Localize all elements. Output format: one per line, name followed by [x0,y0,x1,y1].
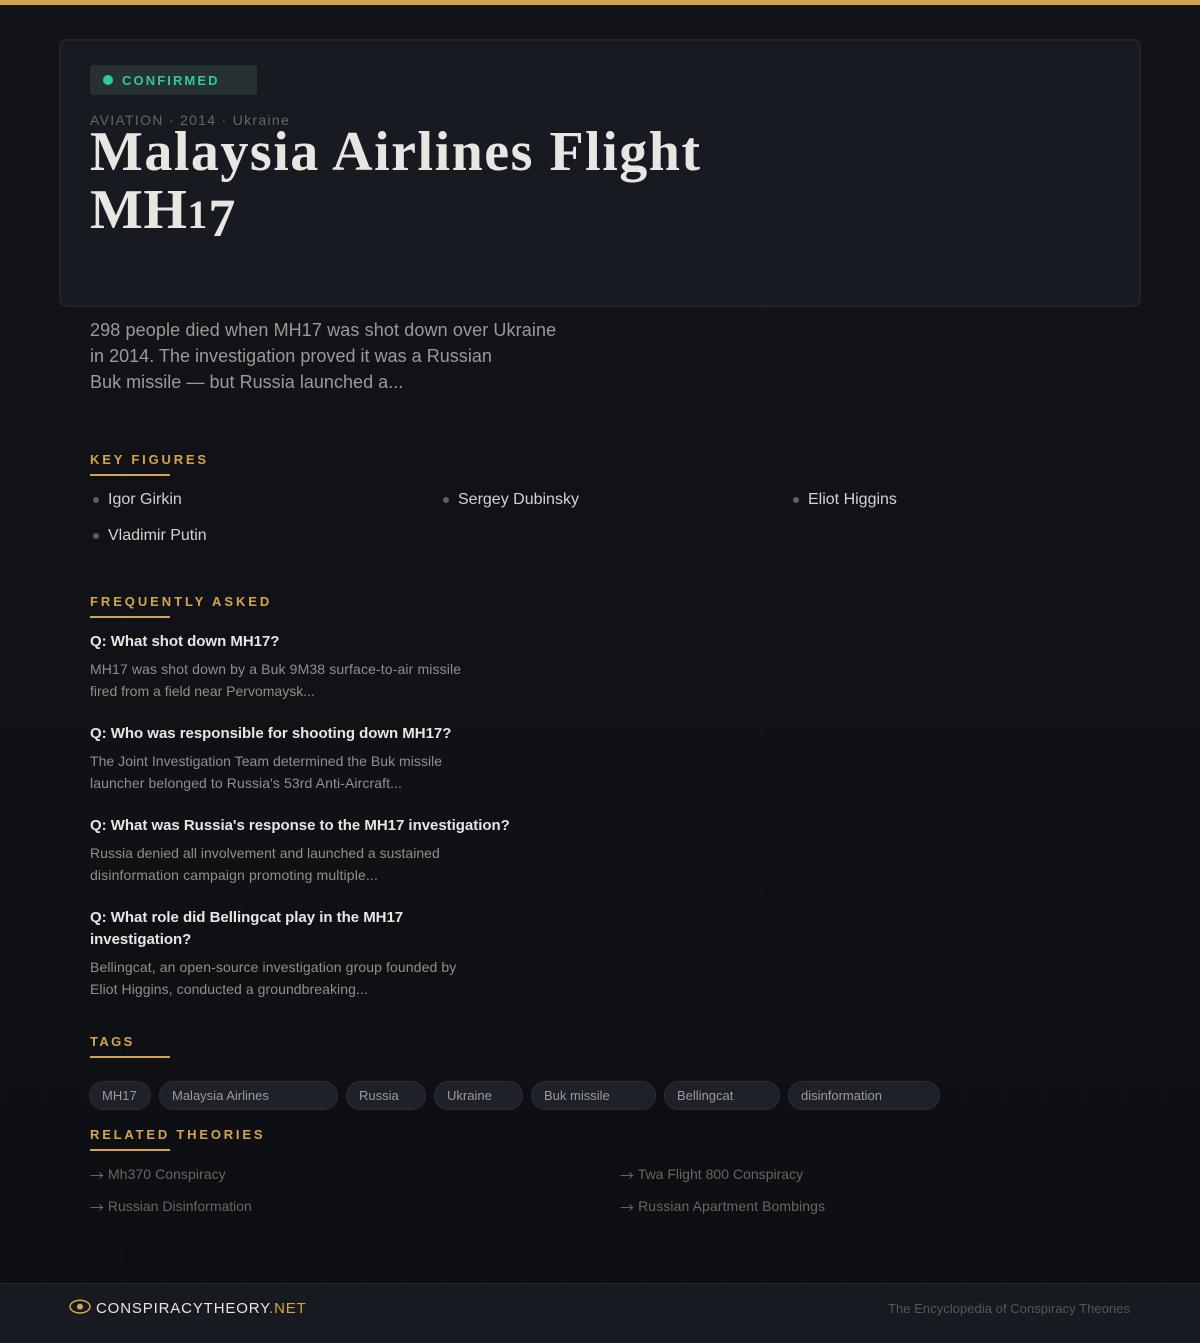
tag: Russia: Russia [359,1088,399,1103]
link: Russian Apartment Bombings: → Russian Apartment Bombings [620,1198,825,1218]
answer 2 [90,753,442,791]
answer 2: The Joint Investigation Team determined the Buk missile [90,753,442,769]
footer tagline: The Encyclopedia of Conspiracy Theories [888,1301,1130,1316]
logo wordmark: CONSPIRACYTHEORY.NET [96,1300,307,1317]
figure: Eliot Higgins: Eliot Higgins [808,490,897,508]
tag: Bellingcat: Bellingcat [677,1088,733,1103]
status dot [103,75,113,85]
figure: Vladimir Putin: Vladimir Putin [108,526,207,544]
title [90,121,702,248]
category and year line: AVIATION · 2014 · Ukraine [90,112,290,128]
panel: hero header [59,39,1141,307]
answer 1: fired from a field near Pervomaysk... [90,683,315,699]
tag: disinformation: disinformation [801,1088,882,1103]
section heading: frequently asked: FREQUENTLY ASKED [90,594,272,609]
tag: MH17 [89,1081,151,1110]
answer 4 [90,959,456,997]
section heading: tags: TAGS [90,1034,135,1049]
summary text: 298 people died when MH17 was shot down over Ukraine [90,320,556,340]
tag: Russia [346,1081,426,1110]
link: Mh370 Conspiracy: → Mh370 Conspiracy [90,1166,226,1186]
answer 4: Bellingcat, an open-source investigation group founded by [90,959,456,975]
tag: Ukraine: Ukraine [447,1088,492,1103]
answer 4: Eliot Higgins, conducted a groundbreaking... [90,981,368,997]
tag: Buk missile: Buk missile [544,1088,610,1103]
faq list [90,633,510,997]
summary text: Buk missile — but Russia launched a... [90,372,403,392]
question 2: Q: Who was responsible for shooting down MH17? [90,725,451,742]
section heading: key figures: KEY FIGURES [90,452,209,467]
tag list [89,1081,940,1110]
answer 1 [90,661,461,699]
footer [0,1283,1200,1343]
answer 3 [90,845,440,883]
question 3: Q: What was Russia's response to the MH17 investigation? [90,817,510,834]
question 4: investigation? [90,931,191,948]
tag: Bellingcat [664,1081,780,1110]
link: Twa Flight 800 Conspiracy: → Twa Flight 800 Conspiracy [620,1166,803,1186]
figure: Sergey Dubinsky: Sergey Dubinsky [458,490,579,508]
related theories links [90,1166,825,1218]
summary text: in 2014. The investigation proved it was a Russian [90,346,492,366]
figure: Igor Girkin: Igor Girkin [108,490,182,508]
question 4: Q: What role did Bellingcat play in the MH17 [90,909,403,926]
title: Malaysia Airlines Flight [90,121,702,183]
top accent bar [0,0,1200,5]
tag: Malaysia Airlines: Malaysia Airlines [172,1088,269,1103]
status badge: confirmed [90,65,257,95]
answer 3: disinformation campaign promoting multiple... [90,867,378,883]
tag: Ukraine [434,1081,523,1110]
question 1: Q: What shot down MH17? [90,633,279,650]
link: Russian Disinformation: → Russian Disinformation [90,1198,252,1218]
summary text [90,320,556,392]
answer 3: Russia denied all involvement and launched a sustained [90,845,440,861]
status label: CONFIRMED [122,73,220,88]
answer 1: MH17 was shot down by a Buk 9M38 surface-to-air missile [90,661,461,677]
question 4 [90,909,403,948]
tag: disinformation [788,1081,940,1110]
tag: Buk missile [531,1081,656,1110]
icon: eye logo [69,1300,91,1314]
title: MH17 [90,179,235,248]
list: key figures [93,490,897,544]
answer 2: launcher belonged to Russia's 53rd Anti-Aircraft... [90,775,402,791]
tag: MH17: MH17 [102,1088,137,1103]
section heading: related theories: RELATED THEORIES [90,1127,265,1142]
tag: Malaysia Airlines [159,1081,338,1110]
